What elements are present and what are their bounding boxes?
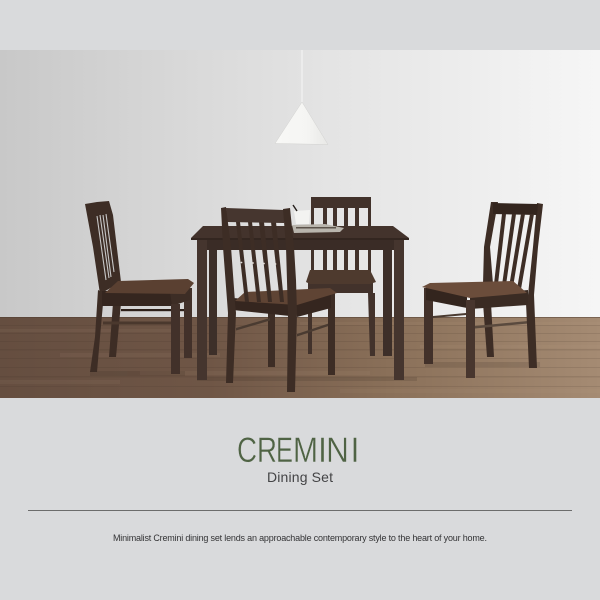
photo: dining room: [0, 50, 600, 398]
right chair top rail: [493, 203, 538, 215]
product title: [237, 431, 360, 470]
left chair back slits: [97, 214, 114, 280]
spoon: [293, 205, 297, 211]
description: Minimalist Cremini dining set lends an approachable contemporary style to the heart of your home.: [113, 533, 487, 543]
plate and magazine: [292, 224, 344, 233]
chair: back: [306, 197, 376, 356]
floor shadows: [90, 362, 540, 381]
product title: R: [257, 431, 277, 470]
cup: [294, 210, 310, 224]
lamp shade: [275, 102, 328, 144]
divider line: [28, 510, 572, 511]
lamp cord: [301, 50, 303, 103]
chair: front center: [221, 207, 337, 392]
front chair slats: [236, 222, 249, 302]
pendant lamp: [275, 50, 328, 144]
product title: M: [293, 431, 318, 470]
wall: [0, 50, 600, 318]
product title: I: [318, 431, 327, 470]
slat screws: [241, 262, 276, 265]
front chair right post: [283, 208, 297, 392]
right chair rear right post: [526, 203, 543, 368]
dining table: [191, 226, 409, 380]
front chair left post: [221, 207, 236, 383]
wood floor: [0, 317, 600, 398]
chair: right: [422, 202, 543, 378]
chair: left: [85, 201, 194, 374]
subtitle: Dining Set: [267, 469, 333, 485]
product title: C: [237, 431, 257, 470]
right chair rear left post: [483, 202, 498, 284]
front chair top rail: [226, 208, 284, 223]
product title: N: [326, 431, 349, 470]
product title: I: [350, 431, 360, 470]
product title: E: [276, 431, 293, 470]
tableware: [292, 205, 344, 233]
